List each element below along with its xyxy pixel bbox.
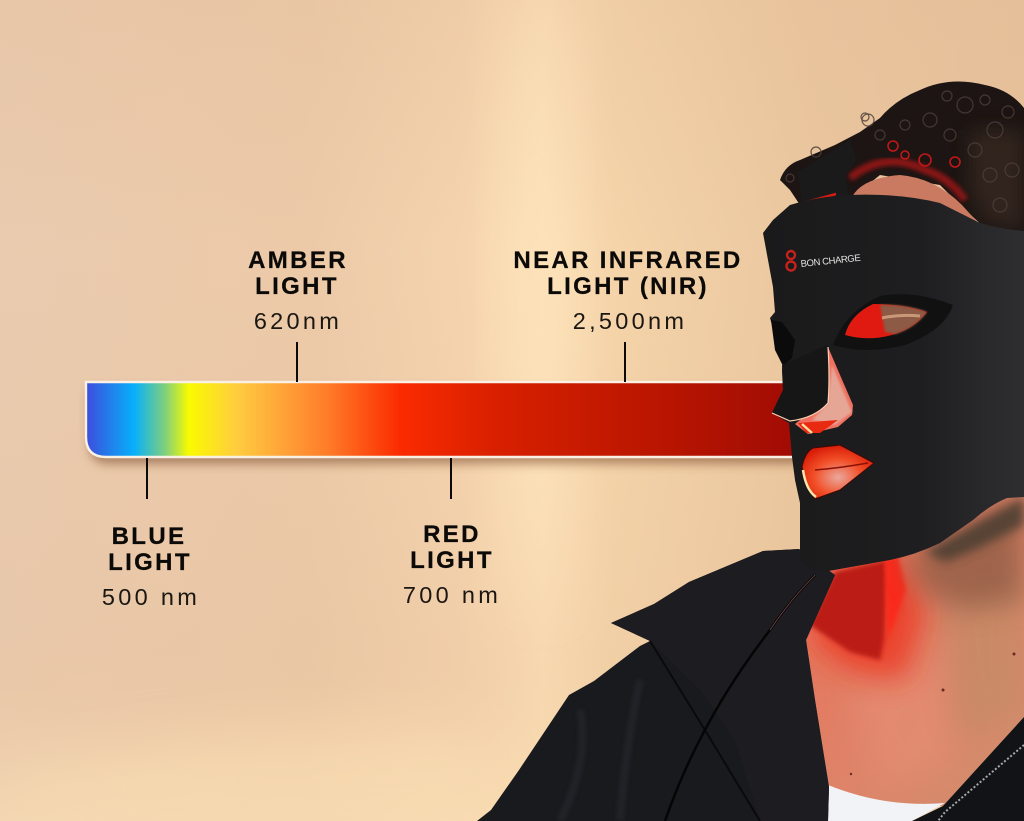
mouth opening	[802, 445, 874, 499]
label: red light: LIGHT	[410, 547, 494, 574]
label: amber light: LIGHT	[255, 273, 339, 300]
strap red slit	[803, 194, 836, 203]
label: blue light: LIGHT	[108, 549, 192, 576]
label: near infrared light: 2,500nm	[573, 308, 687, 334]
label: blue light	[102, 523, 200, 610]
brand logo: BON CHARGE	[800, 253, 861, 270]
mask strap	[798, 140, 856, 205]
nose flap	[772, 345, 829, 421]
label: near infrared light: LIGHT (NIR)	[547, 273, 709, 300]
label: blue light: BLUE	[112, 523, 186, 550]
tick: near infrared	[624, 342, 626, 382]
forehead skin	[852, 175, 980, 225]
tick: red	[450, 458, 452, 499]
label: amber light: 620nm	[254, 308, 342, 334]
label: amber light: AMBER	[248, 247, 348, 274]
label: red light: RED	[423, 521, 481, 548]
near eye opening	[833, 294, 953, 350]
label: near infrared light: NEAR INFRARED	[513, 247, 743, 274]
mask	[763, 195, 1024, 572]
label: near infrared light	[513, 247, 743, 334]
spectrum bar	[86, 382, 803, 464]
jacket	[477, 549, 1024, 821]
hair	[780, 81, 1024, 235]
t-shirt	[828, 785, 945, 821]
label: amber light	[248, 247, 348, 334]
tick: blue	[146, 458, 148, 499]
nose opening	[795, 347, 853, 434]
label: red light: 700 nm	[403, 582, 501, 608]
far eye socket	[771, 320, 795, 366]
tick: amber	[296, 342, 298, 382]
label: blue light: 500 nm	[102, 584, 200, 610]
neck and chest	[806, 480, 1024, 806]
person wearing mask	[477, 81, 1024, 821]
label: red light	[403, 521, 501, 608]
